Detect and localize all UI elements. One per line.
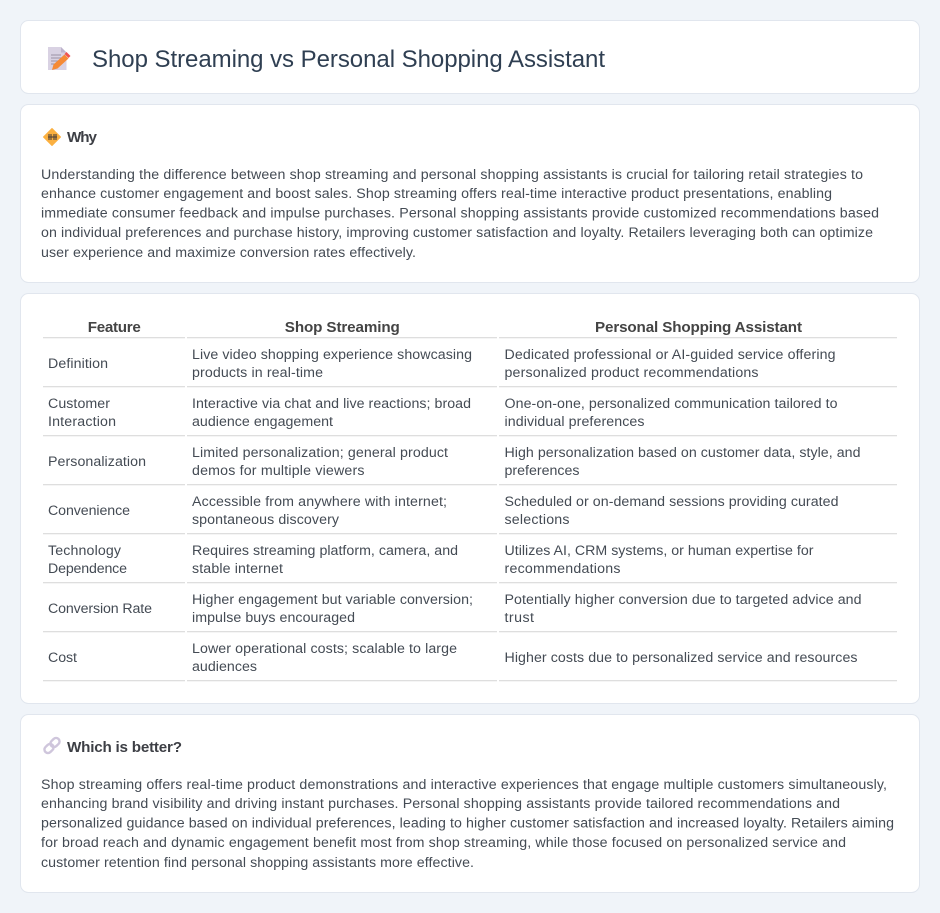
- text block: why: enhance customer engagement and boost sales. Shop streaming offers real-time interactive product presentations, enabling: [41, 186, 832, 202]
- text block: why: user experience and maximize conversion rates effectively.: [41, 245, 416, 261]
- title: Shop Streaming vs Personal Shopping Assistant: [92, 46, 605, 73]
- row: technology dependence: Technology: [48, 543, 122, 559]
- row: cost: Higher costs due to personalized service and resources: [504, 650, 858, 666]
- row: convenience: selections: [504, 512, 570, 528]
- row: conversion rate: [48, 592, 862, 626]
- heading: why: Why: [67, 129, 98, 146]
- row: customer interaction: One-on-one, personalized communication tailored to: [504, 396, 838, 412]
- row: personalization: demos for multiple viewers: [192, 463, 364, 479]
- panel: comparison table: [20, 294, 920, 704]
- row: definition: Definition: [48, 356, 108, 372]
- row: technology dependence: Requires streaming platform, camera, and: [192, 543, 458, 559]
- text block: why: immediate consumer feedback and impulse purchases. Personal shopping assistants provide customized recommendations based: [41, 206, 879, 222]
- icon: link: [43, 736, 61, 755]
- row: convenience: spontaneous discovery: [192, 512, 340, 528]
- row: personalization: High personalization based on customer data, style, and: [504, 445, 860, 461]
- row: convenience: [48, 494, 838, 528]
- row: definition: Live video shopping experience showcasing: [192, 347, 472, 363]
- row: cost: audiences: [192, 659, 257, 675]
- text block: why: Understanding the difference between shop streaming and personal shopping assistants is crucial for tailoring retail strategies to: [41, 167, 863, 183]
- text block: which is better: Shop streaming offers real-time product demonstrations and interactive experiences that engage multiple customers simultaneously,: [41, 777, 887, 793]
- row: technology dependence: recommendations: [504, 561, 620, 577]
- text block: which is better: personalized guidance based on individual preferences, leading to higher customer satisfaction and increased loyalty. Retailers aiming: [41, 816, 894, 832]
- row: conversion rate: Higher engagement but variable conversion;: [192, 592, 473, 608]
- heading: which is better: Which is better?: [67, 739, 182, 756]
- row: personalization: [48, 445, 860, 479]
- row: conversion rate: trust: [504, 610, 534, 626]
- row: definition: personalized product recommendations: [504, 365, 758, 381]
- row: definition: products in real-time: [192, 365, 323, 381]
- row: convenience: Scheduled or on-demand sessions providing curated: [504, 494, 838, 510]
- icon: warning diamond: [44, 128, 60, 146]
- row: customer interaction: audience engagement: [192, 414, 333, 430]
- row: cost: [48, 641, 858, 675]
- row: customer interaction: individual preferences: [504, 414, 644, 430]
- row: personalization: Limited personalization; general product: [192, 445, 448, 461]
- panel: which is better: [20, 714, 920, 892]
- row: customer interaction: [48, 396, 838, 430]
- text block: which is better: [41, 777, 894, 871]
- icon: memo with pencil: [48, 47, 70, 70]
- table header: Personal Shopping Assistant: [595, 319, 802, 336]
- table header: [88, 319, 802, 336]
- row: technology dependence: Utilizes AI, CRM systems, or human expertise for: [504, 543, 814, 559]
- table header: Feature: [88, 319, 141, 336]
- text block: why: [41, 167, 879, 261]
- row: conversion rate: Potentially higher conversion due to targeted advice and: [504, 592, 862, 608]
- row: technology dependence: Dependence: [48, 561, 127, 577]
- row: convenience: Convenience: [48, 503, 130, 519]
- table header: Shop Streaming: [285, 319, 400, 336]
- row: definition: Dedicated professional or AI-guided service offering: [504, 347, 836, 363]
- row: convenience: Accessible from anywhere with internet;: [192, 494, 447, 510]
- row: personalization: Personalization: [48, 454, 146, 470]
- text block: which is better: enhancing brand visibility and driving instant purchases. Personal shopping assistants provide tailored recommendations and: [41, 796, 840, 812]
- row: definition: [48, 347, 836, 381]
- row: personalization: preferences: [504, 463, 580, 479]
- header panel: [20, 20, 920, 94]
- row: cost: Cost: [48, 650, 77, 666]
- text block: which is better: for broad reach and dynamic engagement benefit most from shop streaming, while those focused on personalized service and: [41, 835, 846, 851]
- panel: why: [20, 104, 920, 282]
- row: cost: Lower operational costs; scalable to large: [192, 641, 457, 657]
- row: technology dependence: stable internet: [192, 561, 283, 577]
- row: customer interaction: Interactive via chat and live reactions; broad: [192, 396, 471, 412]
- text block: which is better: customer retention find personal shopping assistants more effective.: [41, 855, 474, 871]
- row: customer interaction: Customer: [48, 396, 110, 412]
- row: conversion rate: impulse buys encouraged: [192, 610, 355, 626]
- row: customer interaction: Interaction: [48, 414, 116, 430]
- text block: why: on individual preferences and purchase history, improving customer satisfaction and loyalty. Retailers leveraging both can optimize: [41, 225, 873, 241]
- row: technology dependence: [48, 543, 814, 577]
- row: conversion rate: Conversion Rate: [48, 601, 152, 617]
